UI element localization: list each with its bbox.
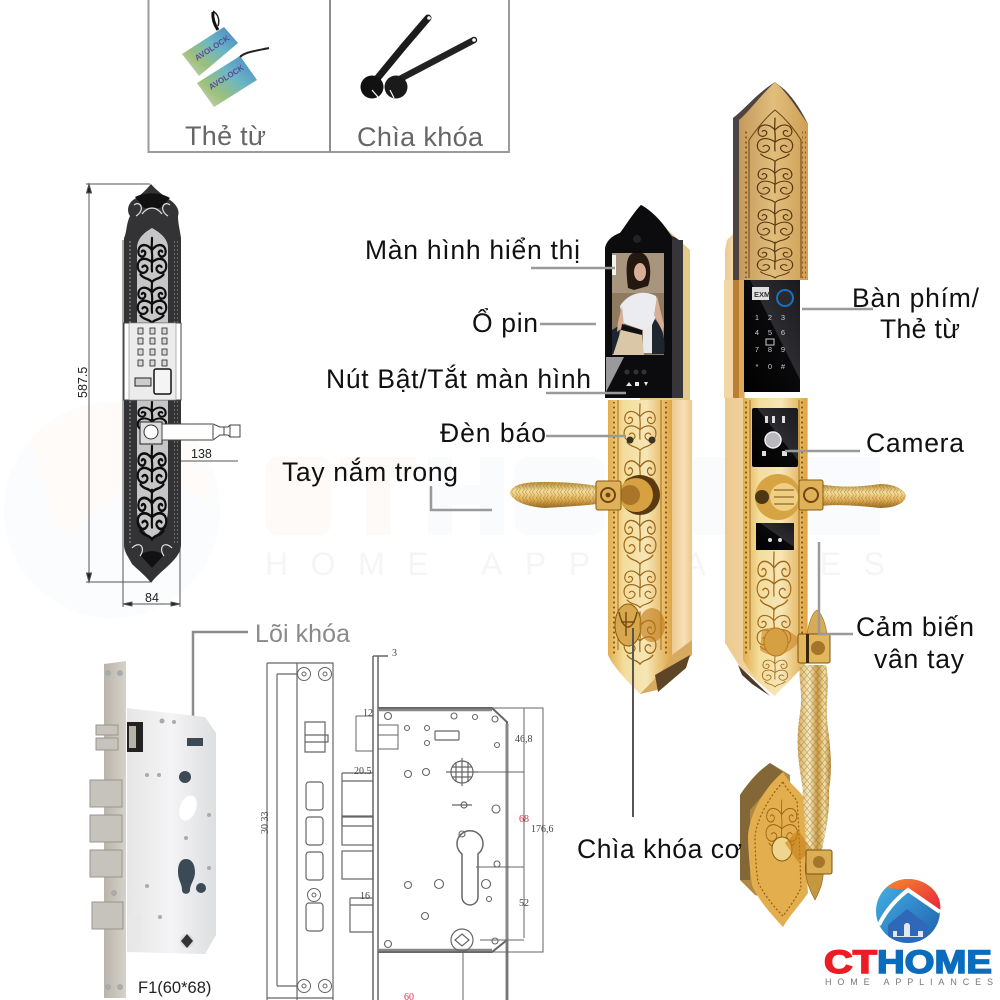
label: Lõi khóa — [193, 620, 350, 725]
button icons — [624, 370, 648, 386]
callout: Bàn phím / Thẻ từ — [802, 283, 980, 344]
dimension labels: mortise drawing: 52 — [519, 898, 529, 909]
callout: Màn hình hiển thị: Màn hình hiển thị — [365, 235, 580, 265]
logo tagline: HOME APPLIANCES — [825, 977, 993, 987]
keypad panel — [124, 323, 181, 400]
dark plate body — [124, 184, 181, 583]
indicator lights — [626, 436, 634, 444]
callout: Camera: Camera — [866, 428, 964, 458]
product: back lock (keypad side) — [724, 82, 906, 927]
callout: Ổ pin — [472, 308, 596, 338]
sensor panel — [756, 523, 794, 550]
keypad: 8 — [768, 345, 772, 354]
text: F1 model: F1(60*68) — [138, 979, 211, 997]
keypad: EXM — [754, 290, 770, 299]
diagram: mortise lock technical drawing — [267, 656, 543, 1000]
outer lever — [755, 474, 906, 520]
keypad: 4 — [755, 328, 759, 337]
upper plate — [733, 82, 808, 280]
dimension: 84: 84 — [145, 591, 159, 605]
panel: accessories table — [148, 0, 509, 152]
lower escutcheon — [740, 763, 832, 927]
icon: mechanical keys — [360, 16, 476, 99]
product: front lock (screen side) — [510, 205, 692, 694]
label: Lõi khóa: Lõi khóa — [255, 620, 350, 648]
callout: Tay nắm trong: Tay nắm trong — [282, 457, 458, 487]
screen housing — [605, 205, 683, 398]
icon: card tags — [182, 11, 269, 107]
dimension labels: mortise drawing — [260, 648, 554, 1000]
dimension labels: mortise drawing: 16 — [360, 891, 370, 902]
callout: Đèn báo: Đèn báo — [440, 418, 546, 448]
dimension: 138: 138 — [191, 447, 212, 461]
callout: Cảm biến vân tay: Cảm biến — [856, 612, 974, 642]
callout: Ổ pin: Ổ pin — [472, 308, 538, 338]
keypad: 9 — [781, 345, 785, 354]
icon: card tags: AVOLOCK — [207, 63, 246, 92]
dimension labels: mortise drawing: 46,8 — [515, 734, 532, 745]
fingerprint panel — [752, 408, 798, 467]
keypad: 5 — [768, 328, 772, 337]
callout: Cảm biến vân tay: vân tay — [874, 644, 965, 674]
watermark: CTHOME logo: HOME APPLIANCES — [265, 546, 885, 582]
callout: Chìa khóa cơ: Chìa khóa cơ — [577, 834, 742, 864]
body side — [725, 232, 745, 640]
icon: card tags: AVOLOCK — [193, 34, 231, 63]
inner handle — [140, 422, 240, 444]
callout: Bàn phím / Thẻ từ: Bàn phím/ — [852, 283, 980, 313]
callout: Nút Bật/Tắt màn hình: Nút Bật/Tắt màn hình — [326, 364, 591, 394]
logo wordmark: CT — [824, 944, 878, 980]
dimension labels: mortise drawing: 68 — [519, 814, 529, 825]
keypad — [724, 280, 800, 398]
dimension labels: mortise drawing: 3 — [392, 648, 397, 659]
spindle knob — [764, 628, 788, 656]
keypad: 0 — [768, 362, 772, 371]
screen photo — [612, 253, 665, 355]
watermark: CTHOME logo — [4, 402, 885, 618]
keypad: 1 — [755, 313, 759, 322]
keypad: 6 — [781, 328, 785, 337]
gold plate — [640, 205, 690, 400]
inner lever — [510, 475, 660, 515]
keypad: # — [781, 362, 786, 371]
key cylinder — [615, 604, 641, 646]
dimension labels: mortise drawing: 20.5 — [354, 766, 372, 777]
logo: CTHOME: HOME — [877, 944, 992, 980]
dimension labels: mortise drawing: 12 — [363, 708, 373, 719]
dimension: 587.5: 587.5 — [76, 367, 90, 398]
photo: mortise lock — [90, 661, 216, 998]
callout: Bàn phím / Thẻ từ: Thẻ từ — [880, 314, 960, 344]
keypad: * — [756, 362, 759, 371]
dimension lines — [86, 184, 238, 607]
logo icon — [876, 879, 940, 943]
logo: CTHOME — [824, 879, 993, 987]
keypad: 3 — [781, 313, 785, 322]
callout: Tay nắm trong — [282, 457, 492, 510]
text: Thẻ từ: Thẻ từ — [185, 121, 266, 151]
text: Chìa khóa: Chìa khóa — [357, 122, 484, 152]
keypad: 2 — [768, 313, 772, 322]
diagram: lock dimension drawing — [76, 184, 240, 607]
keypad: 7 — [755, 345, 759, 354]
pull handle — [798, 610, 831, 860]
dimension labels: mortise drawing: 30 33 — [260, 812, 271, 834]
callout: Cảm biến vân tay — [819, 542, 974, 674]
lower plate — [725, 398, 808, 696]
dimension labels: mortise drawing: 176,6 — [531, 824, 554, 835]
